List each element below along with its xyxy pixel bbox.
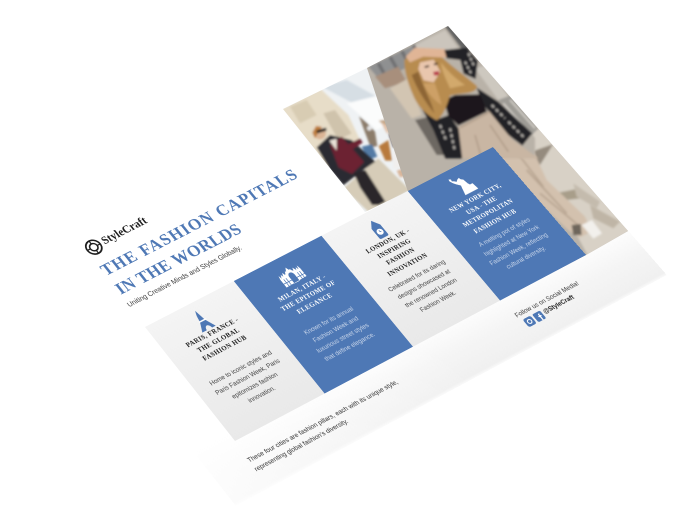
- icon: Instagram: [523, 316, 536, 327]
- card heading: [185, 316, 249, 363]
- card heading: METROPOLITAN: [462, 198, 515, 229]
- card heading: THE GLOBAL: [196, 327, 242, 354]
- woman one: [317, 135, 375, 185]
- panel: London: [321, 191, 500, 347]
- card heading: FASHION: [385, 247, 417, 267]
- card heading: FASHION HUB: [201, 335, 249, 363]
- panel: New York: [408, 147, 586, 301]
- hair: [404, 53, 477, 120]
- trousers: [458, 111, 538, 158]
- card heading: NEW YORK CITY,: [448, 182, 503, 214]
- card heading: ELEGANCE: [296, 292, 335, 316]
- woman two: [379, 140, 392, 161]
- card text: epitomizes fashion: [231, 372, 280, 401]
- kimono: [422, 108, 462, 158]
- icon: Eiffel Tower: [195, 310, 216, 332]
- card text: Known for its annual: [303, 306, 355, 337]
- panel: Milan: [234, 236, 413, 394]
- card text: [478, 217, 550, 271]
- closing statement: representing global fashion's diversity.: [253, 418, 350, 473]
- card text: Fashion Week and: [312, 316, 360, 344]
- card text: innovation.: [247, 386, 277, 405]
- card heading: MILAN, ITALY -: [277, 273, 328, 304]
- face: [418, 60, 440, 82]
- icon: Big Ben: [371, 220, 388, 239]
- card heading: USA - THE: [465, 195, 499, 217]
- top: [444, 94, 487, 126]
- card text: Fashion Week.: [419, 290, 458, 314]
- card text: [303, 306, 377, 363]
- card text: luxurious street styles: [316, 323, 371, 355]
- card heading: INNOVATION: [386, 252, 429, 278]
- card text: Fashion Week, reflecting: [489, 232, 550, 267]
- card text: highlighted at New York: [483, 225, 541, 258]
- photo collage: [283, 26, 628, 271]
- logo wordmark: StyleCraft: [99, 215, 150, 247]
- logo: [84, 215, 150, 255]
- card heading: [365, 228, 429, 278]
- card text: Home to iconic styles and: [209, 350, 274, 388]
- photo: woman in beige trousers: [367, 26, 628, 271]
- subtitle: Uniting Creative Minds and Styles Globally.: [126, 245, 244, 309]
- social block: [513, 280, 581, 327]
- card text: A melting pot of styles: [478, 217, 532, 249]
- title: IN THE WORLDS: [111, 219, 246, 298]
- panel: Paris: [145, 281, 325, 441]
- sleeve: [444, 48, 478, 79]
- social prompt: Follow us on Social Media!: [513, 280, 581, 319]
- neck: [436, 80, 450, 96]
- card text: Paris Fashion Week, Paris: [215, 358, 282, 397]
- card text: the renowned London: [404, 278, 459, 309]
- arm: [406, 48, 447, 62]
- card heading: PARIS, FRANCE -: [185, 316, 241, 349]
- photo: street duo: [283, 68, 408, 212]
- page sheet background: [324, 246, 666, 452]
- card heading: FASHION HUB: [472, 208, 518, 235]
- icon: logo ring: [84, 239, 103, 255]
- icon: Milan cathedral: [278, 266, 306, 288]
- title: THE FASHION CAPITALS: [96, 164, 303, 279]
- social handle: @StyleCraft: [542, 295, 576, 316]
- card text: that define elegance.: [324, 332, 377, 363]
- card text: [387, 259, 459, 314]
- card text: [209, 350, 282, 405]
- card heading: LONDON, UK -: [365, 228, 412, 255]
- icon: Statue of Liberty: [448, 178, 478, 196]
- card text: designs showcased at: [397, 269, 452, 301]
- content layer: [84, 147, 586, 473]
- card text: cultural diversity.: [505, 246, 548, 271]
- icon: Facebook: [532, 310, 546, 322]
- closing statement: These four cities are fashion pillars, each with its unique style,: [246, 379, 400, 464]
- card heading: INSPIRING: [376, 238, 413, 260]
- card heading: THE EPITOME OF: [280, 280, 338, 313]
- card text: Celebrated for its daring: [387, 259, 447, 294]
- card heading: [448, 182, 518, 235]
